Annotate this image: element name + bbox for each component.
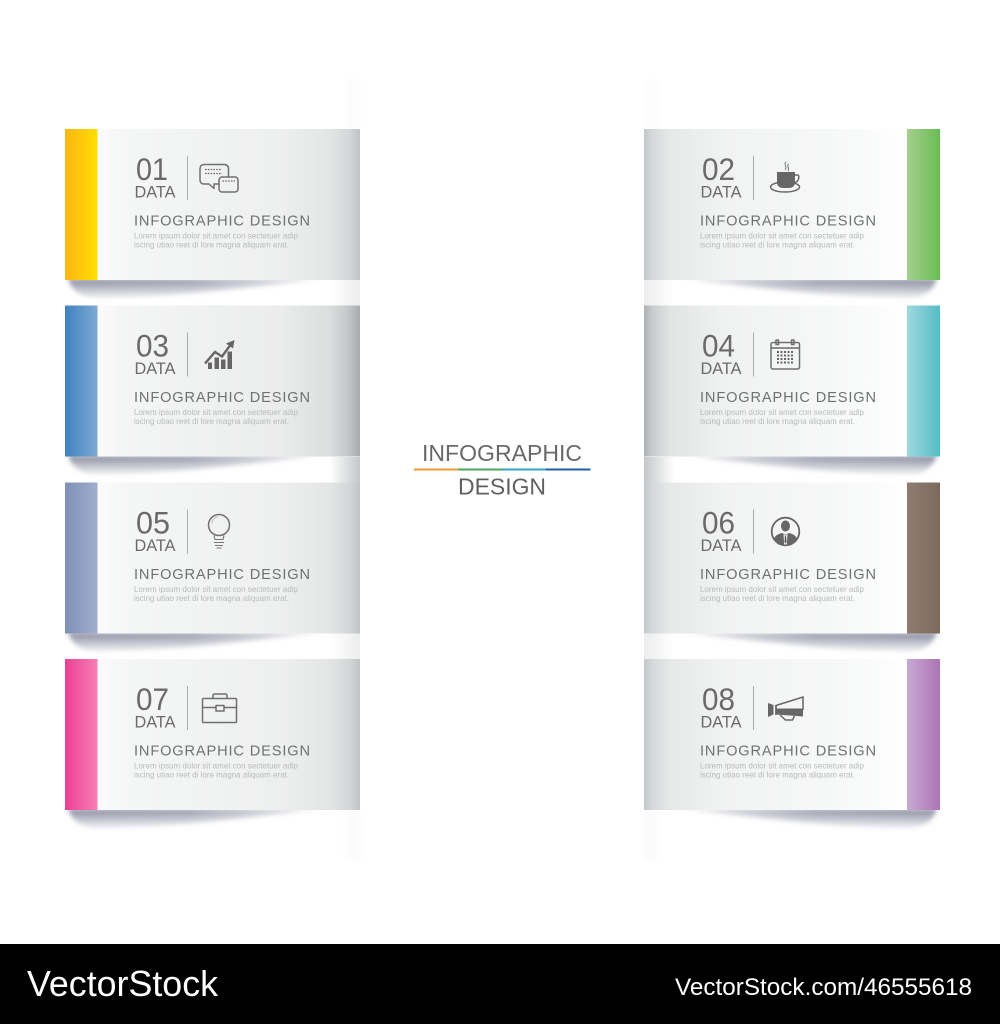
body text 01 <box>134 230 298 250</box>
icon: megaphone <box>768 697 803 720</box>
body text 07: iscing utiao reet di lore magna aliquam erat. <box>134 770 289 780</box>
gap shading between cards <box>330 280 674 659</box>
panel: card 04 <box>644 306 940 474</box>
footer bar <box>0 944 1000 1024</box>
panel: card 08 <box>644 659 940 828</box>
body text 07: Lorem ipsum dolor sit amet con sectetuer adip <box>134 760 298 770</box>
number 06: 06 <box>702 504 735 540</box>
icon: calendar <box>771 340 800 369</box>
body text 03: iscing utiao reet di lore magna aliquam erat. <box>134 416 289 426</box>
card body 05 <box>97 482 360 634</box>
card body 03 <box>97 306 360 456</box>
body text 04 <box>700 407 864 426</box>
body text 06: iscing utiao reet di lore magna aliquam erat. <box>700 593 855 603</box>
faint vertical strips above and below cards <box>346 80 658 860</box>
color tab 05 <box>65 482 98 634</box>
body text 03 <box>134 407 298 426</box>
card body 02 <box>644 129 908 280</box>
heading 08: INFOGRAPHIC DESIGN <box>700 744 876 760</box>
shadow 02 <box>681 279 937 298</box>
number 05: 05 <box>136 504 170 540</box>
number 01: 01 <box>136 151 168 187</box>
panel: card 03 <box>65 306 360 474</box>
color tab 03 <box>65 306 98 456</box>
body text 08: Lorem ipsum dolor sit amet con sectetuer adip <box>700 760 864 770</box>
icon: speech bubbles <box>200 164 238 192</box>
title: INFOGRAPHIC <box>422 440 582 466</box>
body text 07 <box>134 760 298 780</box>
body text 01: iscing utiao reet di lore magna aliquam erat. <box>134 240 289 250</box>
shadow 06 <box>681 632 937 652</box>
card body 08 <box>644 659 908 810</box>
footer url: VectorStock.com/46555618 <box>675 974 972 1001</box>
shadow 01 <box>68 279 324 298</box>
shadow 04 <box>681 456 937 474</box>
heading 05: INFOGRAPHIC DESIGN <box>134 567 310 583</box>
card body 07 <box>97 659 360 810</box>
card body 01 <box>97 129 360 280</box>
heading 07: INFOGRAPHIC DESIGN <box>134 744 310 760</box>
body text 08 <box>700 760 864 780</box>
icon: growth chart <box>205 340 234 369</box>
data label 02: DATA <box>700 182 742 202</box>
color tab 06 <box>907 482 940 634</box>
title <box>414 440 590 500</box>
data label 05: DATA <box>134 536 176 555</box>
icon: briefcase <box>202 694 236 722</box>
panel: card 01 <box>65 129 360 298</box>
shadow 08 <box>681 809 937 828</box>
number 08: 08 <box>702 681 735 717</box>
data label 03: DATA <box>134 359 176 378</box>
body text 08: iscing utiao reet di lore magna aliquam erat. <box>700 770 855 780</box>
color tab 04 <box>907 306 940 456</box>
icon: businessman <box>772 518 799 546</box>
data label 01: DATA <box>134 182 176 202</box>
number 03: 03 <box>136 328 169 364</box>
shadow 07 <box>68 809 324 828</box>
color tab 08 <box>907 659 940 810</box>
icon: light bulb <box>208 514 230 548</box>
color tab 02 <box>907 129 940 280</box>
body text 02: Lorem ipsum dolor sit amet con sectetuer adip <box>700 230 864 240</box>
body text 06 <box>700 584 864 603</box>
data label 04: DATA <box>700 359 742 378</box>
shadow 03 <box>68 456 324 474</box>
body text 02: iscing utiao reet di lore magna aliquam erat. <box>700 240 855 250</box>
number 04: 04 <box>702 328 735 364</box>
data label 06: DATA <box>700 536 742 555</box>
body text 05: iscing utiao reet di lore magna aliquam erat. <box>134 593 289 603</box>
footer logo: VectorStock <box>27 963 219 1004</box>
body text 02 <box>700 230 864 250</box>
panel: card 02 <box>644 129 940 298</box>
body text 06: Lorem ipsum dolor sit amet con sectetuer adip <box>700 584 864 594</box>
icon: coffee cup <box>770 162 800 192</box>
shadow 05 <box>68 632 324 652</box>
card body 06 <box>644 482 908 634</box>
body text 04: iscing utiao reet di lore magna aliquam erat. <box>700 416 855 426</box>
card body 04 <box>644 306 908 456</box>
color tab 01 <box>65 129 98 280</box>
panel: card 06 <box>644 482 940 652</box>
heading 06: INFOGRAPHIC DESIGN <box>700 567 876 583</box>
number 02: 02 <box>702 151 735 187</box>
panel: card 07 <box>65 659 360 828</box>
title: DESIGN <box>458 474 546 500</box>
body text 05: Lorem ipsum dolor sit amet con sectetuer adip <box>134 584 298 594</box>
number 07: 07 <box>136 681 169 717</box>
data label 07: DATA <box>134 712 176 732</box>
heading 01: INFOGRAPHIC DESIGN <box>134 214 310 230</box>
body text 05 <box>134 584 298 603</box>
color tab 07 <box>65 659 98 810</box>
heading 03: INFOGRAPHIC DESIGN <box>134 390 310 406</box>
data label 08: DATA <box>700 712 742 732</box>
panel: card 05 <box>65 482 360 652</box>
body text 03: Lorem ipsum dolor sit amet con sectetuer adip <box>134 407 298 417</box>
heading 02: INFOGRAPHIC DESIGN <box>700 214 876 230</box>
title underline <box>414 468 590 470</box>
body text 01: Lorem ipsum dolor sit amet con sectetuer adip <box>134 230 298 240</box>
body text 04: Lorem ipsum dolor sit amet con sectetuer adip <box>700 407 864 417</box>
heading 04: INFOGRAPHIC DESIGN <box>700 390 876 406</box>
